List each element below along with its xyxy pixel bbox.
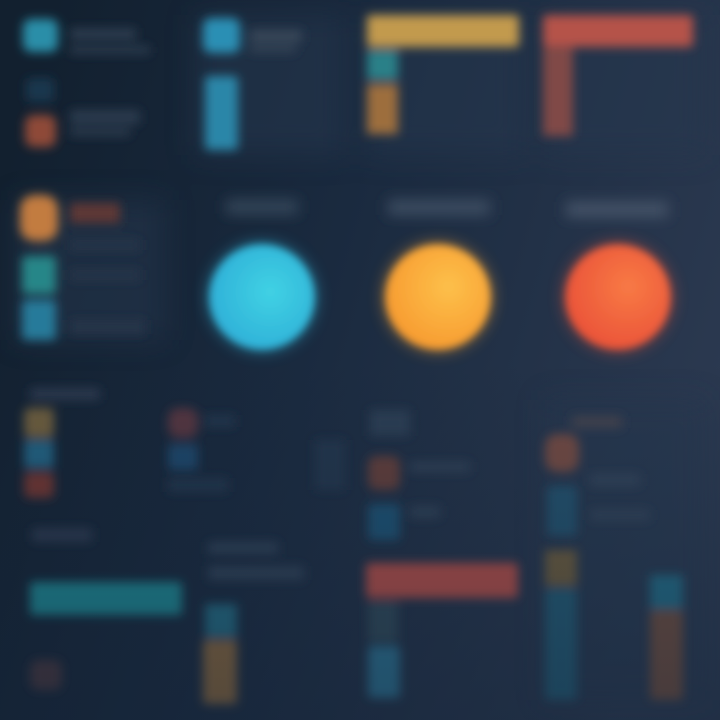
icon: rust block	[368, 456, 400, 490]
panel: bottom left bar	[30, 528, 182, 690]
block: brown column	[650, 610, 683, 700]
block: red column	[543, 48, 573, 136]
block: blue column	[545, 588, 577, 700]
circle: orange	[386, 245, 490, 349]
icon: teal square	[23, 19, 58, 52]
icon: rust circle	[545, 434, 579, 472]
icon: teal block	[22, 256, 56, 294]
block: orange column	[203, 640, 237, 704]
icon: olive block	[24, 408, 54, 438]
block: blue column	[368, 646, 400, 698]
circle: red	[566, 245, 670, 349]
bar: blue column	[205, 76, 238, 150]
circle glow: orange	[384, 243, 492, 351]
panel: lower second list	[168, 408, 345, 492]
panel: top second list	[203, 18, 302, 150]
text block: right list lines	[590, 474, 650, 520]
icon: blue block	[24, 440, 54, 468]
circle: blue	[210, 245, 314, 349]
heading: red circle label	[566, 202, 668, 217]
icon: maroon dot	[168, 408, 198, 438]
block: orange	[367, 84, 398, 134]
icon: rust square	[25, 115, 56, 147]
block: teal column	[205, 604, 237, 638]
block: teal	[367, 50, 398, 80]
text block: third list lines	[410, 462, 470, 518]
panel: lower third list	[368, 410, 470, 540]
text block: lower second lines	[168, 415, 345, 492]
panel: lower right list	[545, 416, 650, 536]
panel: lower left list	[24, 388, 100, 498]
icon: navy block	[368, 504, 400, 540]
text: red label	[70, 203, 120, 223]
panel: top left list	[23, 19, 150, 147]
icon: rust small block	[30, 660, 62, 690]
text block: top left lines	[70, 28, 150, 136]
bar: teal wide	[30, 582, 182, 615]
text: bottom left heading	[32, 528, 92, 542]
panel: top yellow card	[367, 15, 519, 134]
block: olive column	[545, 550, 577, 586]
panel: bottom second column	[203, 542, 304, 704]
heading: orange circle label	[388, 200, 490, 215]
bar: red wide	[366, 563, 518, 598]
block: grey column	[368, 602, 398, 642]
panel: top red card	[543, 15, 693, 136]
text block: second column lines	[250, 30, 302, 52]
panel: middle left list	[20, 195, 145, 340]
block: teal top column	[650, 575, 683, 609]
text: third list heading	[370, 410, 410, 436]
heading: blue circle label	[226, 200, 298, 214]
icon: navy block	[168, 444, 198, 470]
icon: dim teal square	[26, 78, 54, 102]
icon: blue block	[547, 486, 577, 536]
bar: red header	[543, 15, 693, 47]
icon: blue block	[22, 300, 56, 340]
circle glow: red	[564, 243, 672, 351]
panel: bottom right columns	[545, 550, 683, 700]
text block: middle left lines	[70, 240, 145, 334]
icon: blue square	[203, 18, 240, 53]
circle glow: blue	[208, 243, 316, 351]
text: lower left heading	[30, 388, 100, 400]
text: right list heading	[572, 416, 622, 428]
panel: bottom red card	[366, 563, 518, 698]
text block: bottom second heading	[208, 542, 304, 580]
icon: orange square	[20, 195, 58, 241]
bar: yellow header	[367, 15, 519, 47]
icon: dark red block	[24, 472, 54, 498]
